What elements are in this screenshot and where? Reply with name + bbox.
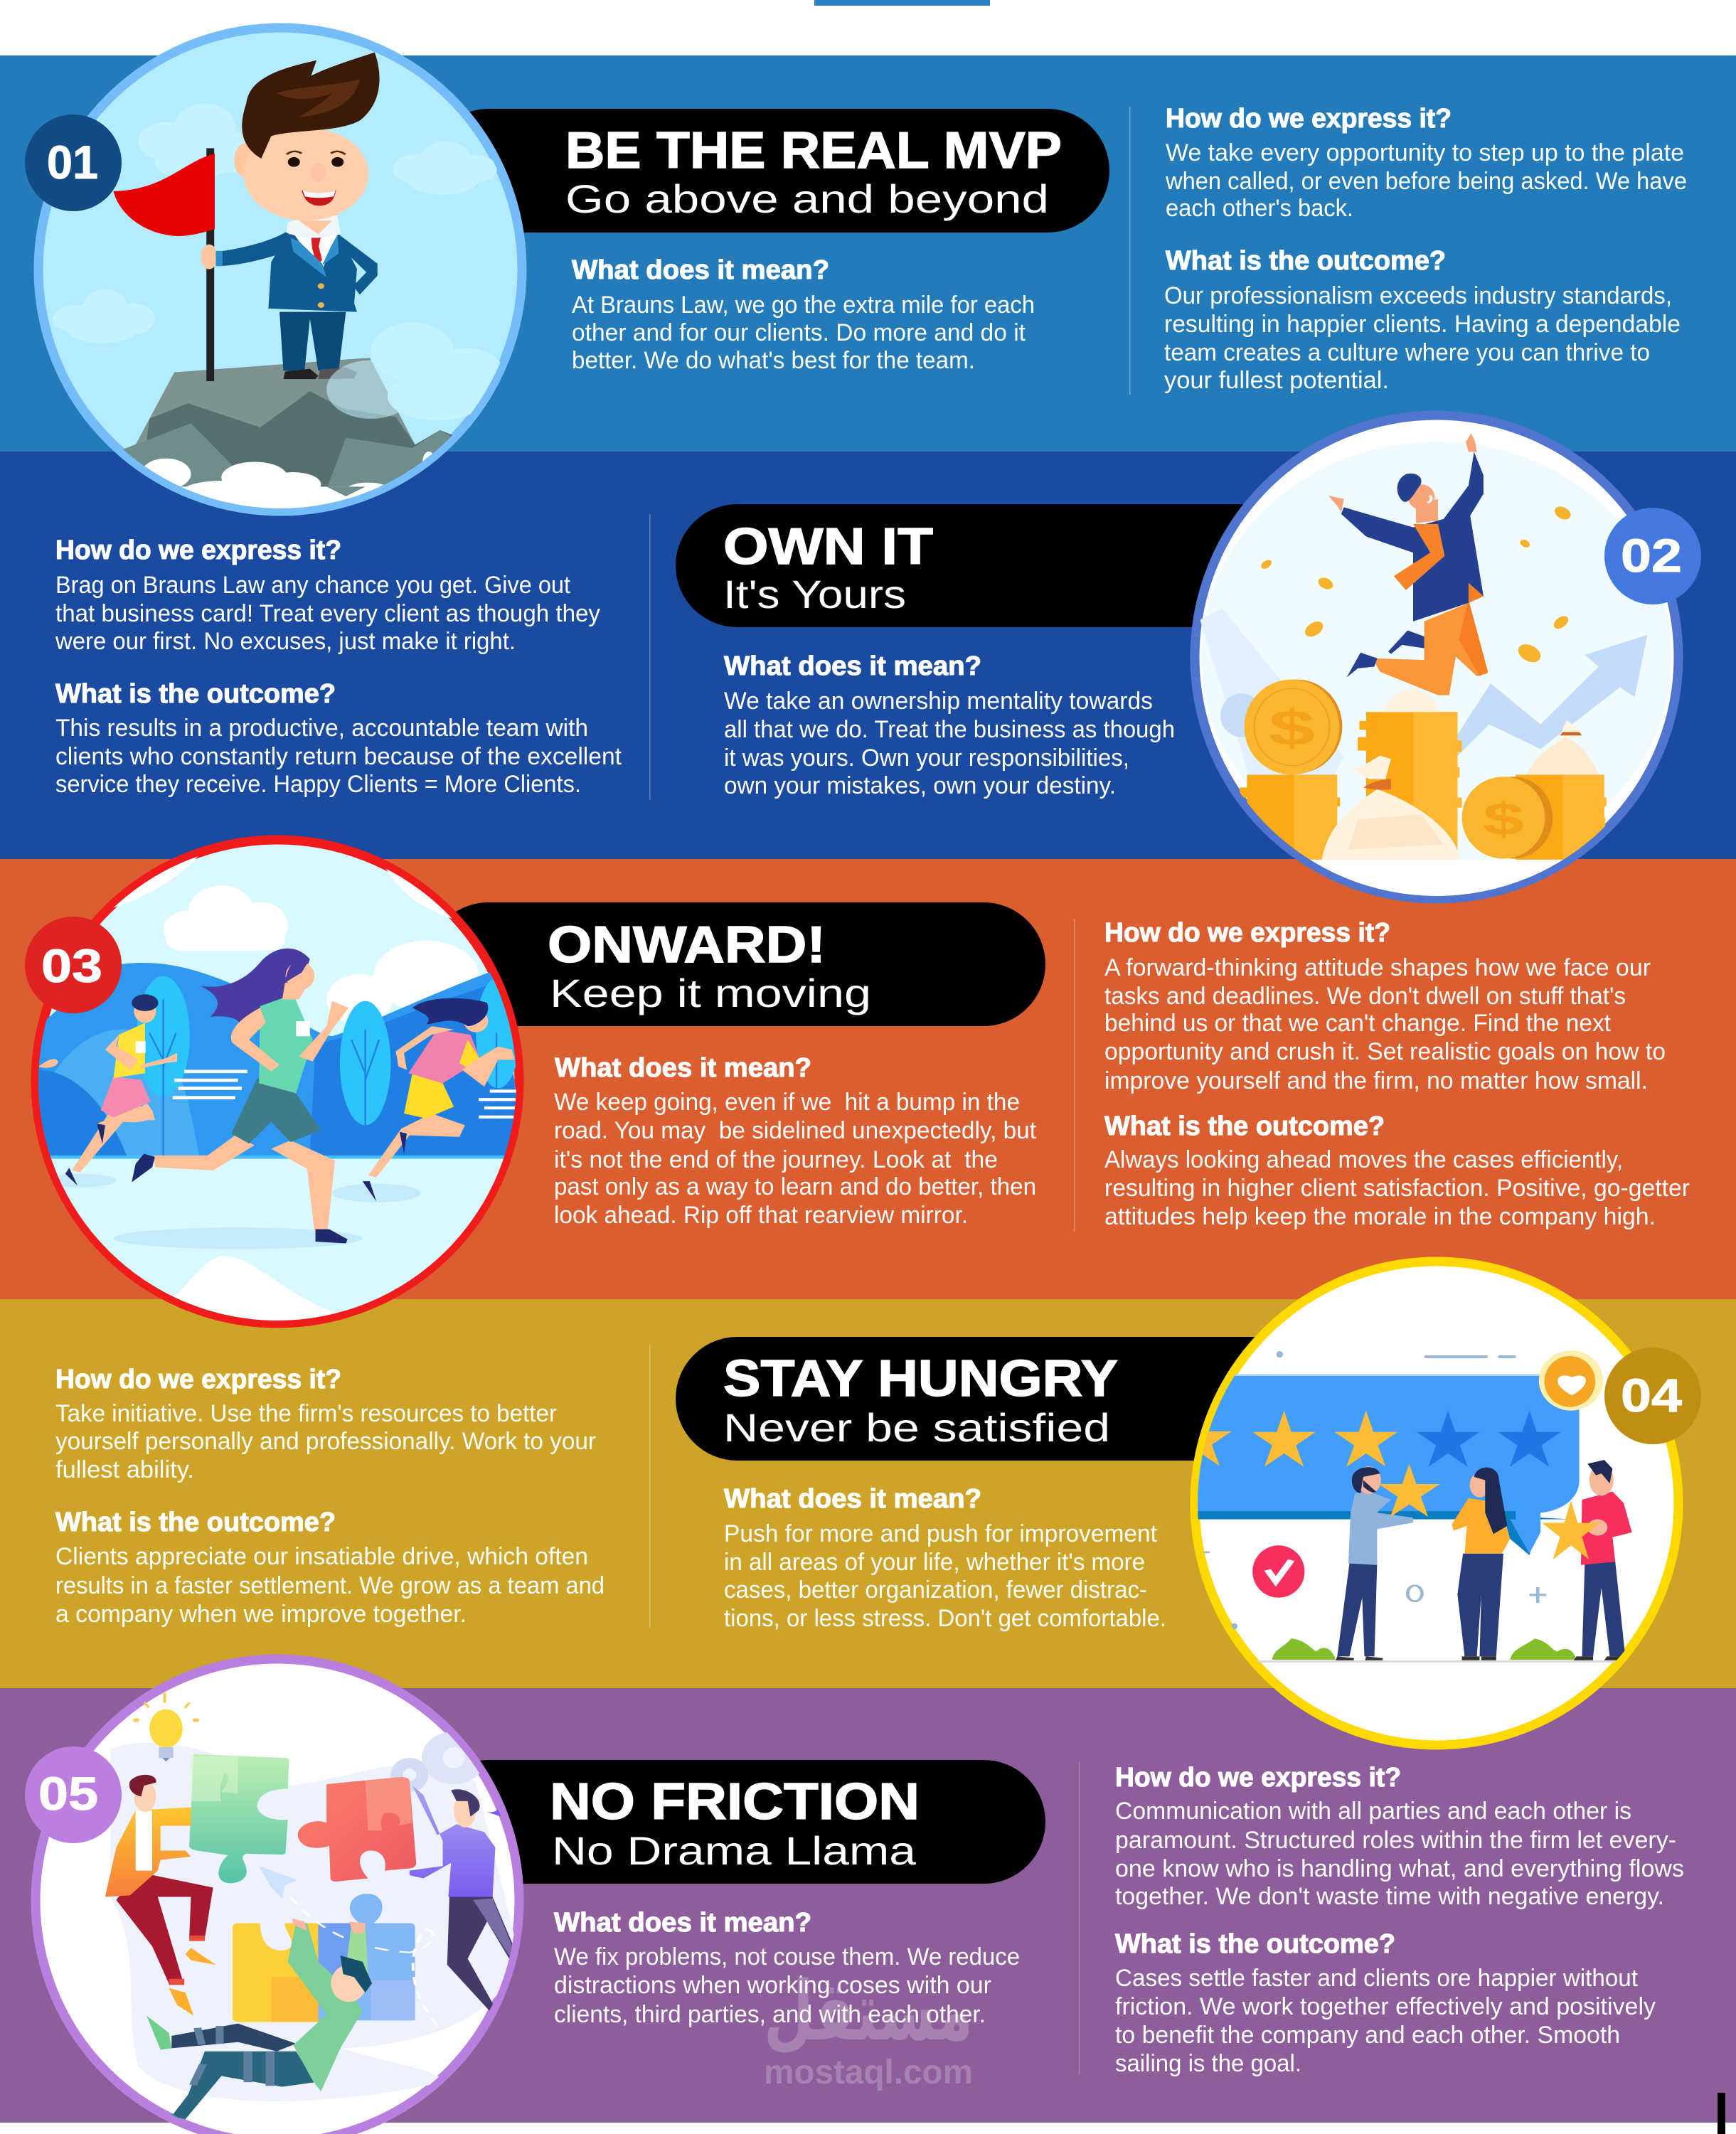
text block: what does it mean 05: clients, third parties, and with each other. [554, 2001, 986, 2028]
text block: what does it mean 03: past only as a way to learn and do better, then [554, 1173, 1036, 1200]
text block: how do we express it 02: were our first. No excuses, just make it right. [55, 628, 516, 655]
coins [1245, 679, 1553, 858]
badge 02 [1604, 508, 1701, 604]
text block: how do we express it 01: We take every opportunity to step up to the plate [1166, 139, 1684, 166]
text block: what is the outcome 02: This results in a productive, accountable team with [55, 715, 588, 742]
panel: 05 No friction [25, 1659, 1684, 2134]
text block: what does it mean 01 [572, 255, 1035, 374]
text block: what does it mean 01: At Brauns Law, we go the extra mile for each [572, 292, 1035, 319]
title banner 02 [676, 504, 1351, 627]
text block: what does it mean 03: road. You may be sidelined unexpectedly, but [554, 1117, 1037, 1144]
text block: what does it mean 01: better. We do what's best for the team. [572, 347, 975, 374]
text block: what is the outcome 01: resulting in happier clients. Having a dependable [1164, 311, 1681, 338]
text block: how do we express it 04 [55, 1365, 596, 1483]
text block: what is the outcome 04: Clients appreciate our insatiable drive, which often [55, 1543, 588, 1570]
text block: how do we express it 04: Take initiative. Use the firm's resources to better [55, 1400, 557, 1427]
check badge [1252, 1545, 1304, 1598]
title banner 04 [676, 1337, 1351, 1461]
band: section 2 background [0, 452, 1736, 859]
panel: 02 Own it [55, 415, 1701, 927]
title banner 01: Go above and beyond [565, 176, 1049, 221]
band: section 4 background [0, 1299, 1736, 1688]
light bulb [133, 1693, 199, 1761]
watermark: mostaql [764, 1964, 973, 2091]
text block: what is the outcome 03: Always looking ahead moves the cases efficiently, [1104, 1146, 1623, 1173]
badge 03: 03 [41, 939, 102, 992]
text block: how do we express it 03: behind us or that we can't change. Find the next [1104, 1010, 1612, 1037]
text block: what is the outcome 04: What is the outcome? [55, 1508, 336, 1537]
title banner 04: Never be satisfied [723, 1405, 1110, 1450]
text block: what does it mean 02 [724, 651, 1175, 799]
panel: 04 Stay hungry [55, 1261, 1701, 1745]
band: section 1 background [0, 55, 1736, 452]
small coins [1259, 505, 1574, 664]
rating bubble [1178, 1374, 1580, 1555]
badge 02: 02 [1621, 529, 1682, 582]
person in orange jacket [105, 1775, 215, 2016]
text block: what does it mean 03: What does it mean? [555, 1053, 811, 1083]
text block: what does it mean 04: Push for more and push for improvement [724, 1520, 1158, 1547]
title banner 03 [427, 902, 1045, 1026]
text block: how do we express it 04: yourself personally and professionally. Work to your [55, 1428, 596, 1455]
text block: what does it mean 05: We fix problems, not couse them. We reduce [554, 1943, 1020, 1970]
text block: what is the outcome 05: What is the outcome? [1115, 1929, 1395, 1959]
coin stacks [1240, 712, 1607, 863]
text block: how do we express it 05: together. We don't waste time with negative energy. [1115, 1883, 1664, 1910]
left runner [65, 994, 177, 1185]
band: section 5 background [0, 1688, 1736, 2123]
text block: how do we express it 02: How do we express it? [55, 535, 341, 565]
panel: 01 Be the real MVP [25, 28, 1687, 521]
text block: what is the outcome 05: to benefit the company and each other. Smooth [1115, 2022, 1620, 2049]
text block: what is the outcome 02: What is the outcome? [55, 679, 336, 709]
text block: what does it mean 05: What does it mean? [554, 1908, 811, 1938]
title banner 02: It's Yours [723, 572, 906, 617]
badge 03 [25, 917, 122, 1013]
text block: what does it mean 04 [724, 1484, 1166, 1632]
badge 04 [1604, 1348, 1701, 1444]
text block: what does it mean 03: We keep going, even if we hit a bump in the [554, 1089, 1020, 1116]
green puzzle piece [189, 1754, 289, 1883]
illustration: team assembling puzzle [36, 1659, 521, 2134]
title banner 05: NO FRICTION [550, 1773, 920, 1830]
paper plane [259, 1866, 297, 1899]
text block: how do we express it 05: one know who is handling what, and everything flows [1115, 1855, 1684, 1882]
badge 04: 04 [1621, 1369, 1682, 1421]
bushes and ground [1255, 1638, 1615, 1663]
text block: how do we express it 03: opportunity and crush it. Set realistic goals on how to [1104, 1038, 1666, 1065]
text block: what is the outcome 01: What is the outcome? [1166, 246, 1446, 276]
title banner 03: Keep it moving [550, 971, 871, 1015]
text block: how do we express it 02: Brag on Brauns Law any chance you get. Give out [55, 572, 571, 599]
text block: what is the outcome 01: Our professionalism exceeds industry standards, [1164, 282, 1672, 309]
red puzzle piece [298, 1777, 416, 1882]
text block: what is the outcome 01: your fullest potential. [1164, 367, 1389, 394]
text block: how do we express it 05: Communication with all parties and each other is [1115, 1798, 1631, 1825]
title banner 05: No Drama Llama [552, 1828, 917, 1873]
text block: how do we express it 03: A forward-thinking attitude shapes how we face our [1104, 954, 1651, 981]
coins: $ [1483, 794, 1524, 844]
text block: how do we express it 05: paramount. Structured roles within the firm let every- [1115, 1827, 1676, 1854]
text block: what is the outcome 04: a company when we improve together. [55, 1601, 467, 1628]
text block: what does it mean 02: all that we do. Treat the business as though [724, 716, 1175, 743]
title banner 04: STAY HUNGRY [723, 1350, 1118, 1407]
text block: what does it mean 05: distractions when working coses with our [554, 1972, 991, 1999]
text block: what is the outcome 05: friction. We work together effectively and positively [1115, 1993, 1656, 2020]
watermark: mostaql: مستقل [764, 1964, 973, 2059]
text block: how do we express it 03: How do we express it? [1104, 918, 1390, 948]
top accent bar [814, 0, 990, 6]
blue puzzle piece [318, 1894, 415, 2020]
badge 01: 01 [47, 136, 98, 188]
illustration: jumping man over coin stacks [1189, 415, 1687, 927]
text block: how do we express it 04: fullest ability. [55, 1456, 194, 1483]
text block: what is the outcome 03: attitudes help keep the morale in the company high. [1104, 1203, 1656, 1230]
text block: what is the outcome 02: service they receive. Happy Clients = More Clients. [55, 771, 581, 798]
man with star [1336, 1463, 1439, 1660]
man in red [1542, 1460, 1632, 1660]
text block: what does it mean 04: tions, or less stress. Don't get comfortable. [724, 1605, 1166, 1632]
text block: what is the outcome 04 [55, 1508, 605, 1628]
text block: what does it mean 02: it was yours. Own your responsibilities, [724, 745, 1129, 772]
text block: how do we express it 03: tasks and deadlines. We don't dwell on stuff that's [1104, 983, 1626, 1010]
text block: what does it mean 03 [554, 1053, 1037, 1229]
text block: what does it mean 01: What does it mean? [572, 255, 829, 285]
text block: what does it mean 02: We take an ownership mentality towards [724, 688, 1153, 715]
band: section 3 background [0, 859, 1736, 1299]
text block: what does it mean 03: look ahead. Rip off that rearview mirror. [554, 1202, 968, 1229]
text block: how do we express it 05: How do we express it? [1115, 1763, 1401, 1793]
text block: what is the outcome 05 [1115, 1929, 1656, 2077]
text block: what does it mean 04: What does it mean? [724, 1484, 981, 1514]
heart badge [1539, 1350, 1603, 1411]
illustration: runners [22, 838, 526, 1328]
text block: how do we express it 01: each other's back. [1166, 195, 1353, 222]
center runner [132, 949, 348, 1243]
decorations [1203, 1351, 1546, 1630]
illustration: businessman on mountain with flag [38, 28, 522, 521]
watermark: mostaql: mostaql.com [764, 2054, 973, 2091]
speed lines [173, 1069, 518, 1119]
clouds [164, 885, 479, 1025]
text block: how do we express it 02: that business card! Treat every client as though they [55, 600, 600, 627]
text block: what does it mean 02: own your mistakes, own your destiny. [724, 772, 1116, 799]
text block: how do we express it 01: How do we express it? [1166, 104, 1452, 134]
right runner [363, 998, 515, 1201]
text block: what is the outcome 05: Cases settle faster and clients ore happier without [1115, 1965, 1639, 1992]
jumping man [1328, 434, 1488, 695]
text block: what does it mean 02: What does it mean? [724, 651, 981, 681]
person in purple hoodie [410, 1786, 518, 2011]
shadows [44, 1174, 420, 1249]
title banner 05 [427, 1760, 1045, 1884]
text block: what is the outcome 01 [1164, 246, 1681, 394]
text block: how do we express it 01 [1165, 104, 1687, 222]
woman [1452, 1468, 1510, 1660]
text block: what is the outcome 04: results in a faster settlement. We grow as a team and [55, 1572, 605, 1599]
badge 01 [25, 114, 122, 211]
mountain [122, 358, 462, 507]
text block: what is the outcome 02 [55, 679, 622, 798]
person in green shirt with striped pants [147, 1919, 372, 2123]
text block: what does it mean 01: other and for our clients. Do more and do it [572, 319, 1026, 346]
text block: what is the outcome 02: clients who constantly return because of the excellent [55, 743, 622, 770]
text block: how do we express it 03 [1104, 918, 1666, 1094]
title banner 02: OWN IT [723, 518, 933, 575]
title banner 01 [427, 109, 1109, 233]
text block: how do we express it 01: when called, or even before being asked. We have [1165, 168, 1687, 195]
text block: what does it mean 04: in all areas of your life, whether it's more [724, 1549, 1145, 1576]
gears [390, 1732, 486, 1792]
title banner 03: ONWARD! [548, 917, 826, 973]
corner marker [1718, 2093, 1725, 2134]
text block: what is the outcome 03 [1104, 1111, 1690, 1230]
illustration: customer rating stars [1168, 1261, 1678, 1745]
text block: how do we express it 02 [55, 535, 600, 655]
text block: what is the outcome 03: resulting in higher client satisfaction. Positive, go-getter [1104, 1175, 1690, 1202]
badge 05: 05 [38, 1767, 98, 1820]
text block: how do we express it 04: How do we express it? [55, 1365, 341, 1394]
text block: how do we express it 03: improve yourself and the firm, no matter how small. [1104, 1067, 1648, 1094]
text block: what does it mean 05 [554, 1908, 1020, 2028]
stars [1168, 1410, 1561, 1467]
dashed path [291, 1897, 457, 2057]
yellow puzzle piece [233, 1923, 320, 2022]
text block: what does it mean 03: it's not the end of the journey. Look at the [554, 1146, 998, 1173]
panel: 03 Onward [22, 838, 1690, 1328]
trees [137, 976, 521, 1157]
text block: what does it mean 04: cases, better organization, fewer distrac- [724, 1577, 1147, 1604]
text block: how do we express it 05 [1115, 1763, 1684, 1910]
coins: $ [1269, 700, 1315, 756]
text block: what is the outcome 01: team creates a culture where you can thrive to [1164, 339, 1650, 366]
text block: what is the outcome 03: What is the outcome? [1104, 1111, 1385, 1141]
text block: what is the outcome 05: sailing is the goal. [1115, 2050, 1301, 2077]
businessman [114, 53, 380, 381]
badge 05 [25, 1746, 122, 1843]
money bags [1322, 688, 1599, 860]
title banner 01: BE THE REAL MVP [565, 122, 1062, 179]
